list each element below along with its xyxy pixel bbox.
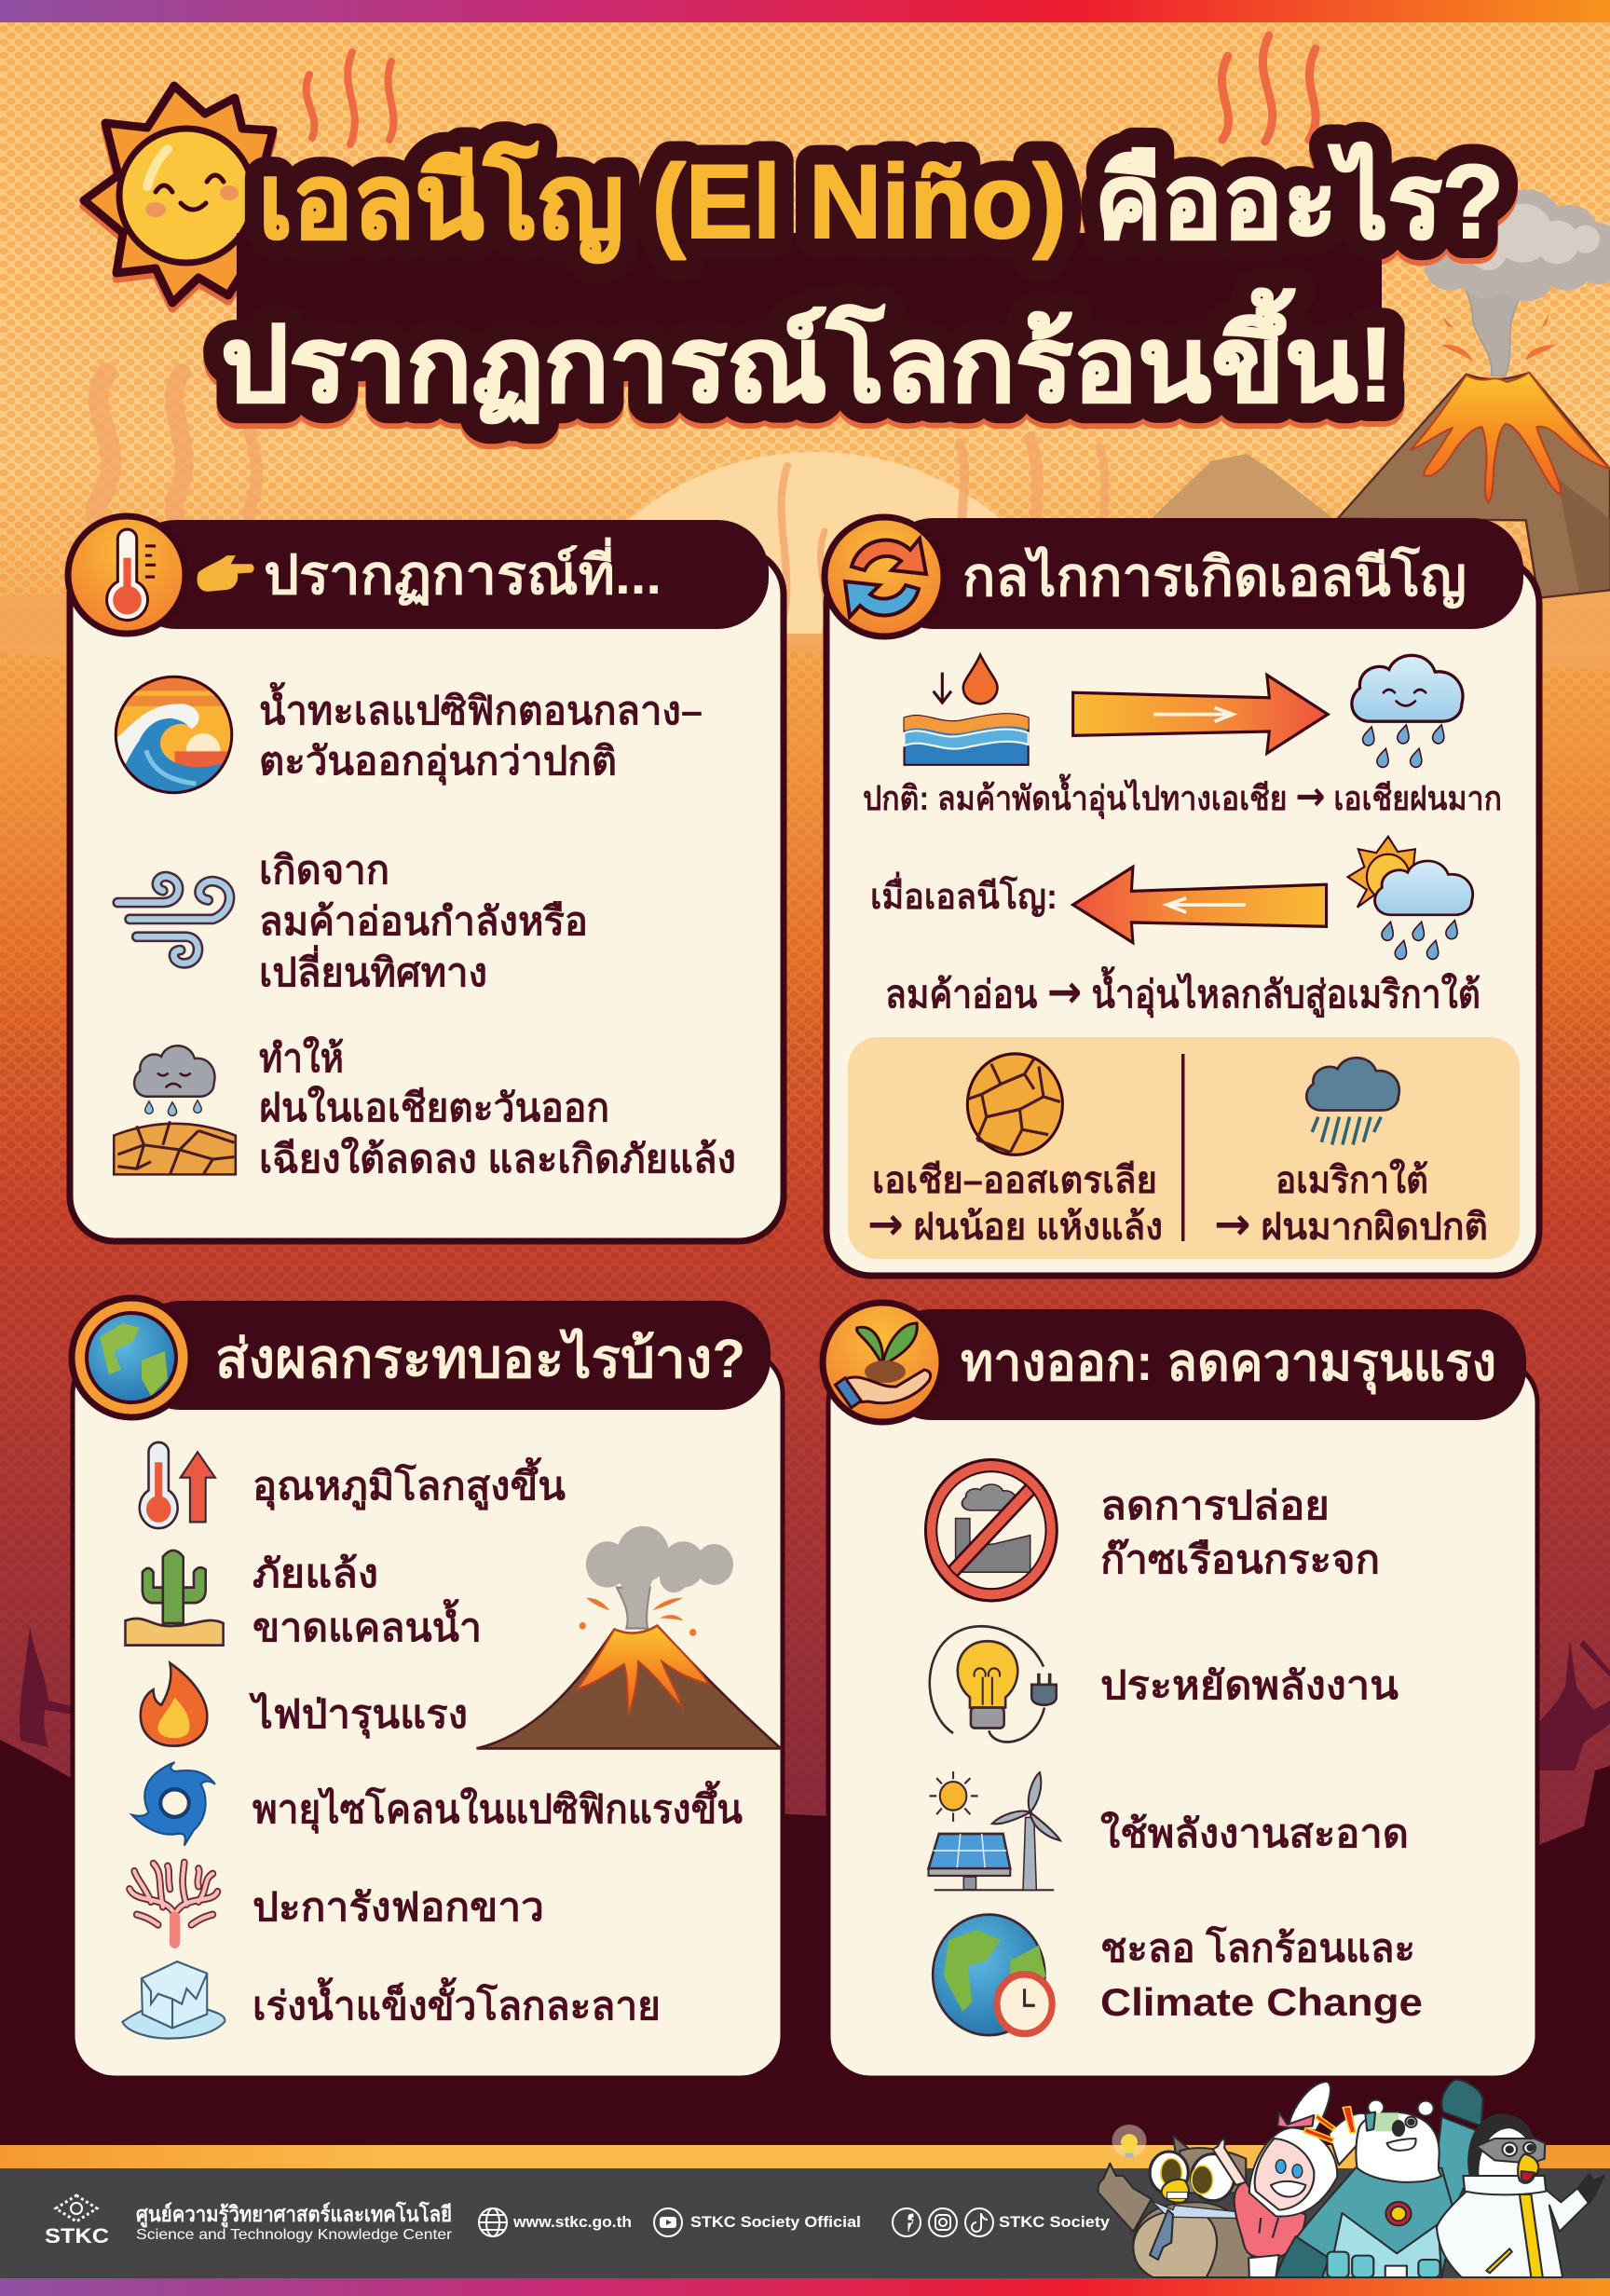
mascot: polar bear xyxy=(1276,2080,1483,2277)
distant mountain xyxy=(1148,454,1338,522)
icon: sad cloud and cracked ground xyxy=(114,1046,236,1174)
background heat waves xyxy=(96,373,1111,652)
text: weak trade winds: เกิดจาก xyxy=(259,848,389,892)
solution: cut greenhouse gases: ลดการปล่อย xyxy=(1100,1483,1330,1527)
header icon: cycle arrows xyxy=(825,517,944,636)
impact: cyclone: พายุไซโคลนในแปซิฟิกแรงขึ้น xyxy=(252,1780,743,1834)
background dot pattern lower xyxy=(0,876,1610,1845)
top colour bar xyxy=(0,0,1610,22)
comparison box xyxy=(848,1037,1520,1259)
text: drought: เฉียงใต้ลดลง และเกิดภัยแล้ง xyxy=(259,1136,736,1181)
icon: sun behind rain cloud xyxy=(1348,837,1473,961)
text: weak trade winds: เปลี่ยนทิศทาง xyxy=(259,945,487,994)
impact: temperature: อุณหภูมิโลกสูงขึ้น xyxy=(252,1456,566,1510)
text: drought xyxy=(259,1035,736,1181)
sun mascot xyxy=(84,86,273,303)
header icon: globe xyxy=(72,1298,191,1417)
impact: wildfire xyxy=(141,1663,468,1746)
mascot: light bulb xyxy=(1112,2125,1147,2157)
YouTube channel xyxy=(654,2208,861,2236)
solution: save energy: ประหยัดพลังงาน xyxy=(1100,1663,1399,1707)
text: South America: อเมริกาใต้ xyxy=(1276,1158,1428,1201)
social accounts: STKC Society xyxy=(999,2213,1111,2231)
title backing xyxy=(237,233,1382,359)
background: pale sun and hills xyxy=(0,226,1610,671)
panel body xyxy=(73,1351,783,2078)
heading: ส่งผลกระทบอะไรบ้าง? xyxy=(215,1328,745,1389)
heading: กลไกการเกิดเอลนีโญ xyxy=(962,544,1467,608)
impact: drought xyxy=(125,1551,482,1649)
header icon: thermometer xyxy=(68,516,185,634)
footer yellow strip xyxy=(0,2145,1610,2168)
arrow: trade wind to Asia xyxy=(1073,675,1328,753)
panel: mechanism xyxy=(825,517,1539,1276)
text: weak trade winds xyxy=(259,848,588,994)
panel header bar xyxy=(130,1301,771,1410)
solution: clean energy: ใช้พลังงานสะอาด xyxy=(1100,1811,1409,1855)
impact: melting ice xyxy=(122,1961,661,2039)
icon: cracked earth xyxy=(967,1054,1062,1155)
panel body xyxy=(828,1360,1537,2078)
text: warmer sea: ตะวันออกอุ่นกว่าปกติ xyxy=(259,739,617,786)
impact: wildfire: ไฟป่ารุนแรง xyxy=(249,1691,468,1739)
icon: wind xyxy=(117,877,230,964)
smoke cloud xyxy=(1424,189,1610,301)
STKC logo: STKC xyxy=(45,2224,109,2248)
text: warmer sea xyxy=(259,681,703,786)
panel body xyxy=(70,550,784,1241)
red heat lines right xyxy=(1221,35,1316,142)
footer grey band xyxy=(0,2168,1610,2278)
solution: cut greenhouse gases xyxy=(925,1459,1380,1601)
text: drought: ฝนในเอเชียตะวันออก xyxy=(259,1085,609,1129)
crater lava xyxy=(1410,373,1610,502)
impact: drought: ภัยแล้ง xyxy=(252,1551,378,1595)
panel: impacts xyxy=(72,1298,783,2078)
STKC logo xyxy=(45,2195,109,2248)
panel header bar xyxy=(125,520,769,629)
organisation name: ศูนย์ความรู้วิทยาศาสตร์และเทคโนโลยี xyxy=(136,2201,452,2228)
title line 1: เอลนีโญ (El Niño) คืออะไร? xyxy=(258,142,1504,264)
label: during El Niño: เมื่อเอลนีโญ: xyxy=(870,871,1057,917)
bottom colour bar xyxy=(0,2278,1610,2296)
website xyxy=(479,2208,632,2236)
solution: cut greenhouse gases: ก๊าซเรือนกระจก xyxy=(1100,1538,1380,1581)
volcano illustration xyxy=(477,1526,781,1748)
silhouette castle spires xyxy=(20,1626,1610,1770)
panel header bar xyxy=(882,518,1523,629)
icon: happy rain cloud xyxy=(1352,655,1463,769)
title line 2: ปรากฏการณ์โลกร้อนขึ้น! xyxy=(221,288,1394,424)
header icon: seedling in hand xyxy=(823,1303,942,1422)
volcano top right xyxy=(1338,189,1610,598)
impact: coral bleaching: ปะการังฟอกขาว xyxy=(252,1885,544,1929)
icon: wave xyxy=(113,675,237,798)
impact: temperature xyxy=(140,1442,566,1528)
solution: slow warming: Climate Change xyxy=(1100,1980,1423,2024)
mascot: bunny girl xyxy=(1213,2082,1369,2277)
panel body xyxy=(826,559,1539,1276)
background dot pattern upper xyxy=(0,22,1610,846)
social accounts xyxy=(893,2208,1111,2236)
panel header bar xyxy=(880,1309,1526,1420)
text: weak trade winds: ลมค้าอ่อนกำลังหรือ xyxy=(259,899,588,943)
website: www.stkc.go.th xyxy=(512,2213,632,2231)
heading: ปรากฏการณ์ที่... xyxy=(264,537,662,606)
arrow: warm water flows back xyxy=(1073,867,1327,943)
text: South America xyxy=(1214,1158,1488,1250)
solution: slow warming: ชะลอ โลกร้อนและ xyxy=(1100,1925,1415,1970)
smoke plume xyxy=(1463,282,1526,376)
text: Asia-Australia: → ฝนน้อย แห้งแล้ง xyxy=(867,1198,1163,1250)
text: Asia-Australia xyxy=(867,1160,1163,1250)
text: warmer sea: น้ำทะเลแปซิฟิกตอนกลาง– xyxy=(259,681,703,732)
impact: melting ice: เร่งน้ำแข็งขั้วโลกละลาย xyxy=(252,1976,661,2028)
panel: solutions xyxy=(823,1303,1537,2078)
text: weak trades to South America: ลมค้าอ่อน → น้ำอุ่นไหลกลับสู่อเมริกาใต้ xyxy=(885,964,1480,1018)
red heat lines left xyxy=(307,52,394,144)
icon: heavy rain cloud xyxy=(1306,1058,1399,1144)
impact: coral bleaching xyxy=(130,1863,544,1943)
mascot: owl xyxy=(1098,2136,1252,2277)
organisation name xyxy=(136,2201,453,2243)
mascot: penguin xyxy=(1437,2114,1604,2277)
title xyxy=(84,86,1504,424)
YouTube channel: STKC Society Official xyxy=(690,2213,861,2231)
panel: what is it xyxy=(68,516,784,1241)
organisation name: Science and Technology Knowledge Center xyxy=(136,2227,453,2243)
impact: drought: ขาดแคลนน้ำ xyxy=(252,1598,482,1649)
impact: cyclone xyxy=(132,1762,743,1846)
text: drought: ทำให้ xyxy=(259,1035,344,1080)
text: normal conditions: ปกติ: ลมค้าพัดน้ำอุ่นไปทางเอเชีย → เอเชียฝนมาก xyxy=(863,773,1502,820)
solution: save energy xyxy=(930,1626,1399,1742)
text: South America: → ฝนมากผิดปกติ xyxy=(1214,1198,1488,1250)
mascots xyxy=(1098,2080,1604,2277)
bottom dark silhouette xyxy=(0,1740,1610,2152)
heading: ทางออก: ลดความรุนแรง xyxy=(961,1332,1496,1395)
solution: clean energy xyxy=(929,1771,1409,1890)
icon: pointing hand xyxy=(197,555,254,592)
solution: slow warming xyxy=(933,1915,1423,2035)
icon: warm water xyxy=(905,655,1029,765)
text: Asia-Australia: เอเชีย–ออสเตรเลีย xyxy=(872,1160,1157,1201)
